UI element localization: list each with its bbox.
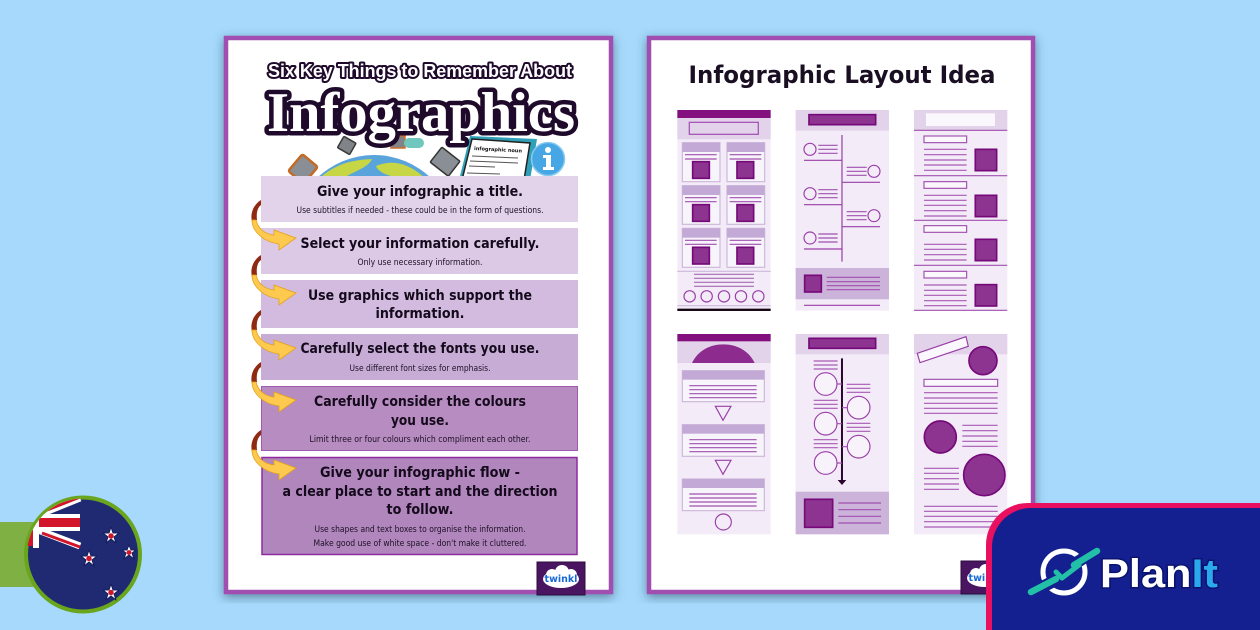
step 3 box: Use graphics which support the <box>308 288 532 304</box>
icon: phone <box>337 136 356 155</box>
green tab <box>0 522 40 587</box>
illustration: technology and globe <box>288 136 566 176</box>
step 2 box: Only use necessary information. <box>358 258 482 268</box>
step 6 box: to follow. <box>386 502 454 518</box>
icon: dictionary page <box>460 136 537 176</box>
arrow 1 <box>251 200 296 250</box>
icon: tablet left <box>288 154 318 176</box>
panel: six key things poster <box>226 38 611 595</box>
step 3 box <box>261 280 578 328</box>
wordmark: PlanIt <box>1100 552 1218 596</box>
step 6 box <box>262 458 577 554</box>
southern cross stars <box>81 527 136 600</box>
step 4 box: Carefully select the fonts you use. <box>300 341 540 357</box>
layout D: flow with triangles <box>677 334 771 534</box>
arrow 3 <box>251 310 296 360</box>
panel: layout ideas poster <box>649 38 1033 594</box>
twinkl logo: twinkl <box>545 574 577 585</box>
icon: information circle <box>532 142 564 176</box>
twinkl logo right: twinkl <box>969 573 1001 584</box>
layout F: freeform circles <box>914 334 1007 534</box>
layout B: timeline <box>796 110 889 311</box>
step 6 box: Give your infographic flow - <box>320 465 520 481</box>
badge: New Zealand flag <box>0 497 140 612</box>
PlanIt pink edge <box>986 503 1260 630</box>
subtitle: Six Key Things to Remember About <box>268 61 572 81</box>
arrow 5 <box>251 430 296 480</box>
step 6 box: Use shapes and text boxes to organise the information. <box>314 525 526 535</box>
step 5 box: Limit three or four colours which compliment each other. <box>310 435 530 445</box>
step 1 box: Use subtitles if needed - these could be in the form of questions. <box>296 206 544 216</box>
layout row 1 <box>677 110 1007 311</box>
step 1 box: Give your infographic a title. <box>317 184 523 200</box>
heading: Infographic Layout Idea <box>688 61 996 89</box>
badge: PlanIt logo <box>986 503 1260 630</box>
layout E: central arrow timeline <box>796 334 889 534</box>
icon: dictionary page: infographic noun <box>474 146 523 155</box>
arrow 4 <box>251 362 296 412</box>
icon: globe <box>319 155 429 176</box>
layout card frame <box>649 38 1033 592</box>
icon: teal capsule <box>404 138 424 148</box>
step 5 box <box>262 386 578 450</box>
layout A: card grid <box>677 110 771 311</box>
step 1 box <box>261 176 578 222</box>
arrow 2 <box>251 255 296 305</box>
union jack <box>20 497 80 548</box>
step 3 box: information. <box>376 306 464 322</box>
step 2 box: Select your information carefully. <box>300 236 540 252</box>
twinkl logo right <box>961 561 1009 594</box>
step 6 box: Make good use of white space - don't make it cluttered. <box>314 539 526 549</box>
step 4 box: Use different font sizes for emphasis. <box>350 364 490 374</box>
step 5 box: you use. <box>391 413 449 429</box>
step 4 box <box>261 334 578 380</box>
poster card frame <box>226 38 611 592</box>
icon: tablet right <box>430 147 460 176</box>
twinkl logo <box>537 562 585 595</box>
step 2 box <box>261 228 578 274</box>
step 6 box: a clear place to start and the direction <box>282 484 558 500</box>
main title: Infographics <box>267 82 575 144</box>
PlanIt navy panel <box>992 508 1260 630</box>
layout row 2 <box>677 334 1007 534</box>
flag disc <box>26 498 140 612</box>
step 5 box: Carefully consider the colours <box>314 394 526 410</box>
icon: planet with check <box>1031 551 1097 593</box>
layout C: stacked sections <box>914 110 1007 311</box>
icon: device top <box>391 136 405 148</box>
